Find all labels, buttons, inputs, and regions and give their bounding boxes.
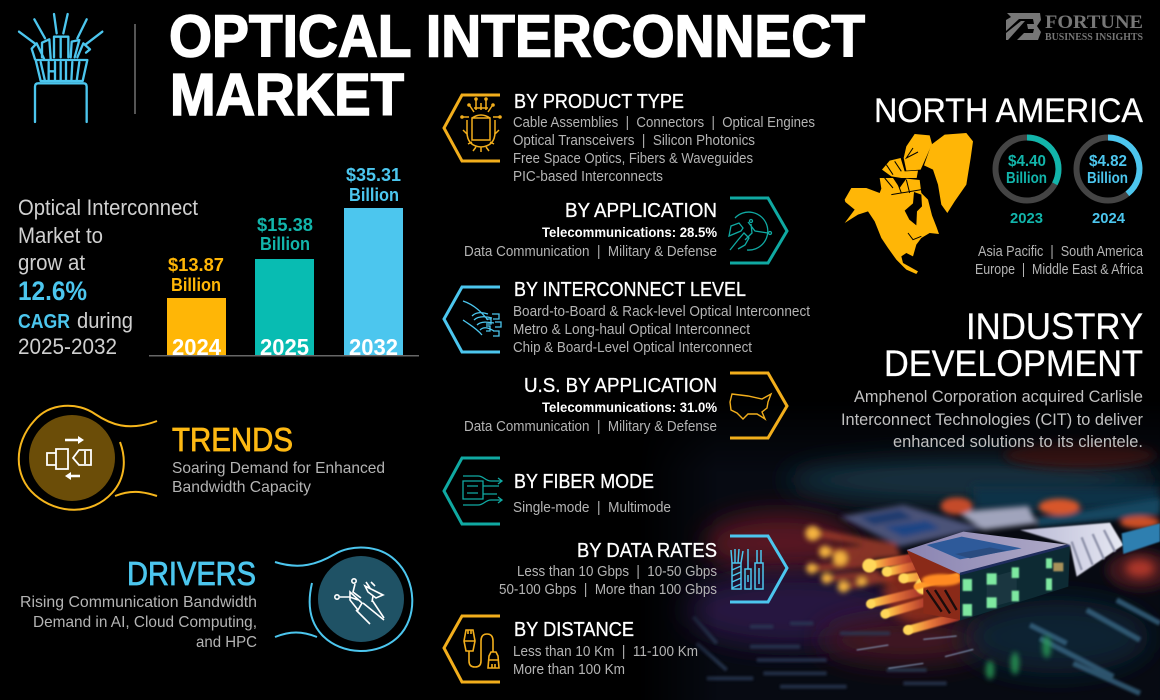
panel: industry development: DEVELOPMENT bbox=[884, 343, 1143, 384]
bar 2024 bbox=[167, 255, 226, 360]
product type text bbox=[513, 91, 815, 185]
distance text: Less than 10 Km | 11-100 Km bbox=[513, 644, 698, 660]
panel: industry development: Interconnect Technologies (CIT) to deliver bbox=[841, 410, 1143, 429]
hexagon with cable icon bbox=[730, 536, 787, 602]
donut: 2023 bbox=[996, 138, 1058, 227]
CAGR statement: 2025-2032 bbox=[18, 334, 117, 359]
data rates text: Less than 10 Gbps | 10-50 Gbps bbox=[517, 564, 717, 580]
data rates text: 50-100 Gbps | More than 100 Gbps bbox=[499, 582, 717, 598]
title: MARKET bbox=[170, 62, 404, 128]
U.S. application text: U.S. BY APPLICATION bbox=[524, 375, 717, 397]
title bbox=[169, 4, 865, 128]
bar 2025: 2025 bbox=[260, 334, 309, 360]
bar 2024: 2024 bbox=[172, 334, 221, 360]
CAGR statement: Market to bbox=[18, 223, 103, 248]
panel: by interconnect level bbox=[444, 279, 810, 356]
donut: 2024: Billion bbox=[1087, 170, 1128, 187]
panel: industry development: Amphenol Corporation acquired Carlisle bbox=[854, 387, 1143, 406]
donut: 2024: 2024 bbox=[1092, 210, 1126, 227]
divider bbox=[134, 24, 136, 114]
drivers text: DRIVERS bbox=[127, 555, 256, 592]
hexagon with US map icon bbox=[730, 373, 787, 438]
hexagon with product icon bbox=[444, 95, 502, 161]
product type text: Optical Transceivers | Silicon Photonics bbox=[513, 133, 755, 149]
panel: trends bbox=[19, 406, 385, 510]
interconnect level text: BY INTERCONNECT LEVEL bbox=[514, 279, 746, 301]
hexagon with ethernet cable icon bbox=[444, 616, 500, 682]
donut: 2023: 2023 bbox=[1010, 210, 1043, 227]
interconnect level text bbox=[513, 279, 810, 356]
product type text: BY PRODUCT TYPE bbox=[514, 91, 684, 113]
panel: by distance bbox=[444, 616, 698, 682]
logo: Fortune Business Insights: FORTUNE bbox=[1045, 12, 1143, 33]
panel: U.S. by application bbox=[464, 373, 787, 438]
interconnect level text: Board-to-Board & Rack-level Optical Interconnect bbox=[513, 304, 810, 320]
front connector fibers bbox=[872, 558, 957, 630]
trends text: TRENDS bbox=[172, 421, 293, 458]
drivers text: Demand in AI, Cloud Computing, bbox=[33, 614, 257, 631]
U.S. application text bbox=[464, 375, 718, 435]
U.S. application text: Telecommunications: 31.0% bbox=[542, 399, 718, 415]
other regions list bbox=[975, 244, 1144, 278]
application text bbox=[464, 200, 718, 260]
distance text: BY DISTANCE bbox=[514, 619, 634, 641]
donut: 2023: Billion bbox=[1006, 170, 1047, 187]
bar 2025: $15.38 bbox=[257, 215, 313, 235]
donut: 2023: $4.40 bbox=[1008, 153, 1046, 170]
interconnect level text: Metro & Long-haul Optical Interconnect bbox=[513, 322, 750, 338]
product type text: Cable Assemblies | Connectors | Optical Engines bbox=[513, 115, 815, 131]
application text: Telecommunications: 28.5% bbox=[542, 224, 718, 240]
drivers text: Rising Communication Bandwidth bbox=[20, 594, 257, 611]
panel: by fiber mode bbox=[444, 458, 671, 524]
interconnect level text: Chip & Board-Level Optical Interconnect bbox=[513, 340, 752, 356]
rear connector bbox=[805, 497, 1160, 592]
bar 2032: 2032 bbox=[349, 334, 398, 360]
bar 2032: Billion bbox=[349, 185, 399, 205]
front connector boot bbox=[1020, 523, 1123, 577]
data rates text: BY DATA RATES bbox=[577, 540, 717, 562]
CAGR statement: CAGR bbox=[18, 311, 70, 333]
logo: Fortune Business Insights: BUSINESS INSIGHTS bbox=[1045, 32, 1143, 43]
fiber mode text: Single-mode | Multimode bbox=[513, 500, 671, 516]
CAGR statement: Optical Interconnect bbox=[18, 195, 198, 220]
CAGR statement: during bbox=[77, 308, 133, 333]
keyboard streaks bbox=[693, 600, 1160, 693]
distance text: More than 100 Km bbox=[513, 662, 625, 678]
bar chart bbox=[149, 165, 419, 360]
hexagon with fiber icon bbox=[444, 287, 501, 352]
hexagon with fiber mode icon bbox=[444, 458, 502, 524]
trends badge bbox=[19, 406, 157, 510]
bar 2032 bbox=[344, 165, 403, 360]
distance text bbox=[513, 619, 698, 678]
data rates text bbox=[499, 540, 717, 598]
bar 2024: $13.87 bbox=[168, 255, 224, 275]
background photo: glowing fiber connector bbox=[637, 398, 1160, 700]
fiber mode text: BY FIBER MODE bbox=[514, 471, 654, 493]
drivers text bbox=[20, 555, 257, 651]
application text: Data Communication | Military & Defense bbox=[464, 244, 717, 260]
panel: industry development: enhanced solutions to its clientele. bbox=[893, 432, 1143, 451]
title: OPTICAL INTERCONNECT bbox=[169, 4, 865, 70]
hexagon with application icon bbox=[729, 198, 787, 263]
panel: by data rates bbox=[499, 536, 787, 602]
CAGR statement bbox=[18, 195, 198, 359]
panel: industry development: INDUSTRY bbox=[966, 306, 1143, 347]
front connector body bbox=[907, 532, 1070, 574]
trends text: Soaring Demand for Enhanced bbox=[172, 460, 385, 477]
donut: 2024 bbox=[1076, 138, 1140, 227]
CAGR statement: 12.6% bbox=[18, 276, 87, 306]
application text: BY APPLICATION bbox=[565, 200, 717, 222]
product type text: PIC-based Interconnects bbox=[513, 169, 663, 185]
bar 2025: Billion bbox=[260, 234, 310, 254]
donut: 2024: $4.82 bbox=[1089, 153, 1127, 170]
bar 2032: $35.31 bbox=[346, 165, 401, 185]
map: North America bbox=[845, 133, 973, 274]
drivers text: and HPC bbox=[196, 634, 257, 651]
panel: industry development bbox=[841, 306, 1143, 451]
photo fades bbox=[637, 398, 717, 700]
trends text: Bandwidth Capacity bbox=[172, 479, 311, 496]
U.S. application text: Data Communication | Military & Defense bbox=[464, 419, 717, 435]
fiber mode text bbox=[513, 471, 671, 516]
heading: North America: NORTH AMERICA bbox=[874, 92, 1143, 130]
panel: by product type bbox=[444, 91, 815, 185]
logo: Fortune Business Insights bbox=[1006, 12, 1143, 43]
drivers badge bbox=[275, 548, 412, 651]
bar 2025 bbox=[255, 215, 314, 360]
product type text: Free Space Optics, Fibers & Waveguides bbox=[513, 151, 753, 167]
CAGR statement: grow at bbox=[18, 250, 85, 275]
icon: fiber optic cable bbox=[19, 14, 102, 122]
panel: by application bbox=[464, 198, 787, 263]
trends text bbox=[172, 421, 385, 496]
bar 2024: Billion bbox=[171, 275, 221, 295]
panel: drivers bbox=[20, 548, 412, 651]
